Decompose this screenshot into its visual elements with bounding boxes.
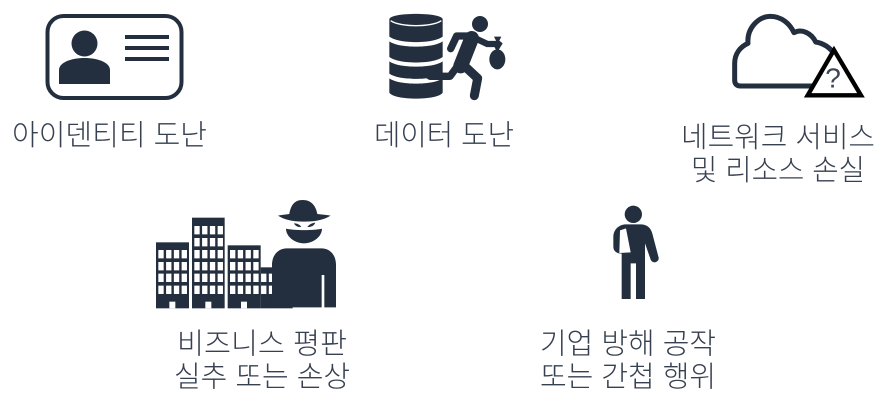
label: sabotage or espionage: 기업 방해 공작 (540, 328, 716, 360)
label: loss of business reputation: 실추 또는 손상 (174, 362, 350, 394)
label: identity theft: 아이덴티티 도난 (12, 120, 207, 152)
panel: data theft (374, 14, 514, 152)
panel: loss of network services and resources (681, 16, 875, 187)
icon: cloud with warning triangle (735, 16, 861, 95)
icon: city buildings and masked person (156, 200, 336, 308)
icon: ID card (48, 16, 182, 98)
icon: database and running thief (389, 14, 505, 99)
label: sabotage or espionage: 또는 간첩 행위 (540, 362, 716, 394)
label: loss of network services and resources: 네트워크 서비스 (681, 122, 875, 154)
label: loss of network services and resources: 및 리소스 손실 (691, 155, 865, 187)
label: loss of business reputation: 비즈니스 평판 (177, 328, 347, 360)
label: data theft: 데이터 도난 (374, 120, 514, 152)
panel: loss of business reputation (156, 200, 350, 394)
icon: cloud with warning triangle: ? (825, 62, 841, 93)
panel: identity theft (12, 16, 207, 152)
label: loss of business reputation (174, 328, 350, 394)
label: sabotage or espionage (540, 328, 716, 394)
icon: person with arm in sling (613, 206, 659, 299)
label: loss of network services and resources (681, 122, 875, 187)
panel: sabotage or espionage (540, 206, 716, 394)
